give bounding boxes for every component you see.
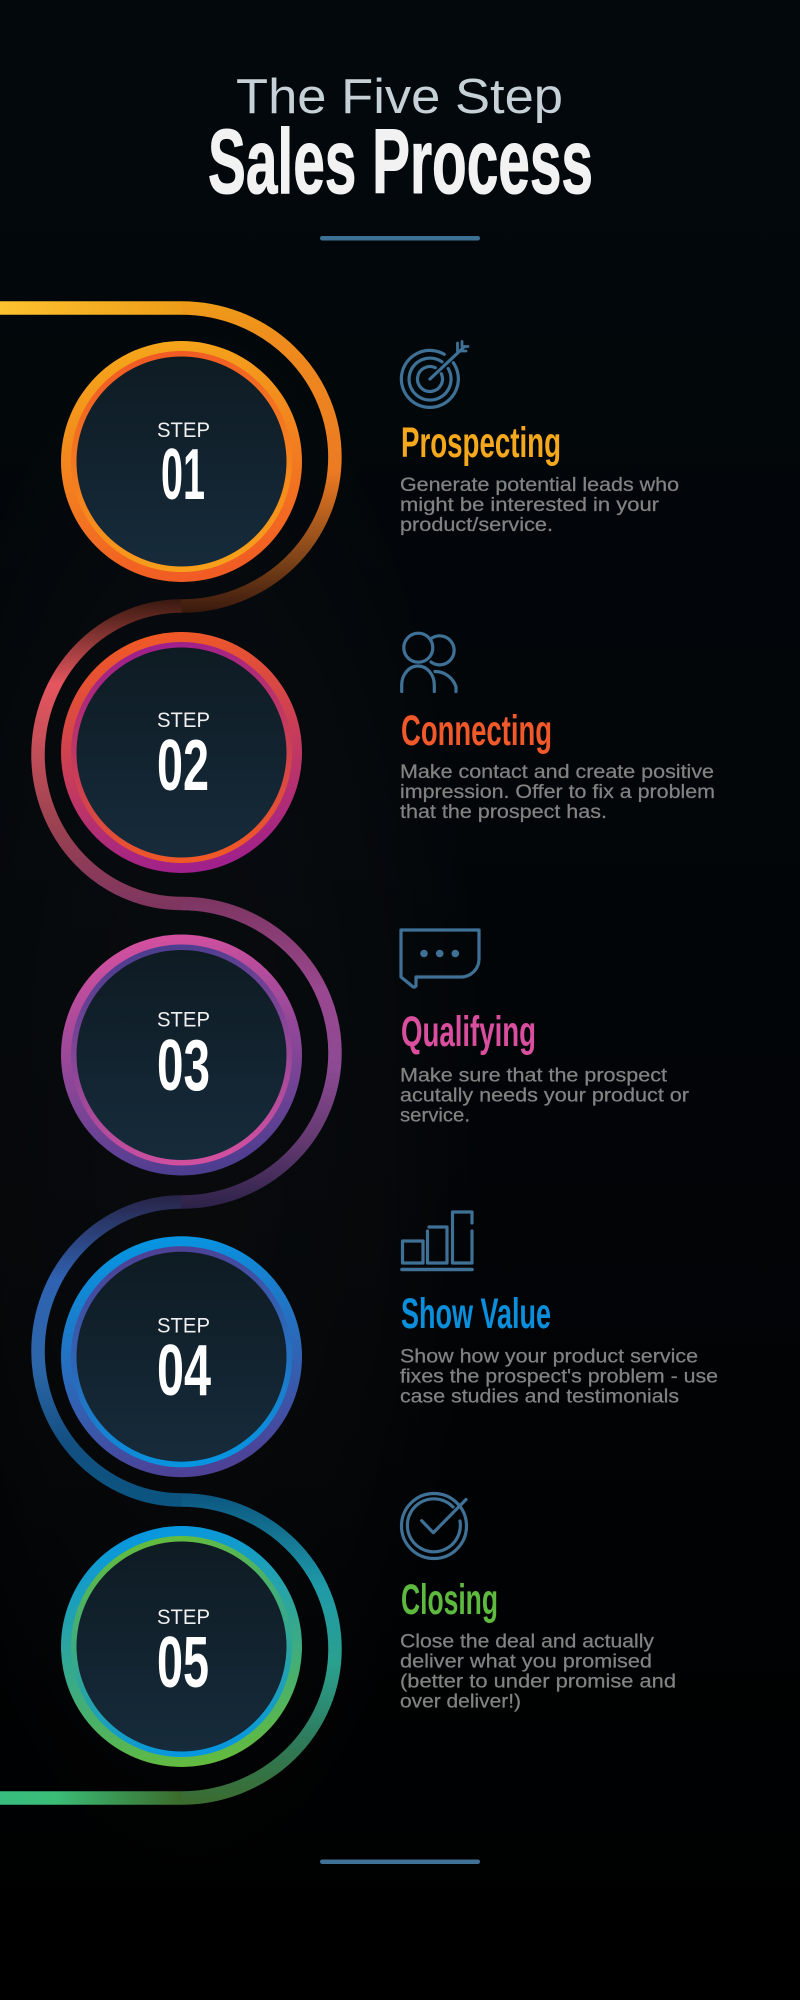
step 4 number: 04 <box>157 1331 211 1411</box>
bottom divider <box>320 1860 480 1864</box>
step 4 badge <box>61 1236 302 1477</box>
step 2 icon: people <box>402 633 456 692</box>
step 4 description: fixes the prospect's problem - use <box>400 1366 718 1388</box>
step 5 heading: Closing <box>401 1576 498 1624</box>
step 1 badge <box>61 341 302 582</box>
step 2 number: 02 <box>157 726 209 806</box>
step 1 description <box>400 475 679 536</box>
step 4 icon: bar chart <box>402 1212 472 1270</box>
step 1 description: product/service. <box>400 515 553 536</box>
step 5 badge <box>61 1526 302 1767</box>
step 2 description: impression. Offer to fix a problem <box>400 782 715 803</box>
step 5 icon: check mark <box>402 1494 466 1558</box>
step 5 description: deliver what you promised <box>400 1652 652 1672</box>
step 4 description: case studies and testimonials <box>400 1386 679 1408</box>
step 5 description <box>400 1632 676 1712</box>
step 3 heading: Qualifying <box>401 1008 536 1056</box>
step 2 description: that the prospect has. <box>400 802 607 823</box>
step 5 description: (better to under promise and <box>400 1672 676 1692</box>
step 3 label: STEP <box>157 1008 210 1032</box>
step 3 description: service. <box>400 1106 470 1126</box>
step 5 description: Close the deal and actually <box>400 1632 655 1652</box>
step 1 description: Generate potential leads who <box>400 475 679 496</box>
step 4 description <box>400 1346 718 1408</box>
step 1 label: STEP <box>157 419 210 442</box>
step 5 label: STEP <box>157 1606 210 1629</box>
step 2 label: STEP <box>157 709 210 732</box>
step 4 description: Show how your product service <box>400 1346 698 1368</box>
winding path connecting the steps <box>0 308 335 1798</box>
step 1 description: might be interested in your <box>400 495 660 516</box>
step 3 description: acutally needs your product or <box>400 1086 690 1106</box>
step 4 heading: Show Value <box>401 1290 551 1338</box>
step 5 description: over deliver!) <box>400 1692 521 1712</box>
step 1 icon: target <box>401 342 468 407</box>
step 3 badge <box>61 934 302 1176</box>
step 3 description: Make sure that the prospect <box>400 1066 668 1086</box>
title <box>208 70 593 213</box>
top divider <box>320 236 480 240</box>
step 2 heading: Connecting <box>401 707 552 755</box>
step 3 description <box>400 1066 690 1126</box>
step 5 number: 05 <box>157 1623 209 1703</box>
step 3 icon: speech bubble <box>401 930 479 987</box>
step 1 heading: Prospecting <box>401 419 561 467</box>
step 2 description: Make contact and create positive <box>400 762 714 783</box>
step 2 description <box>400 762 715 823</box>
step 1 number: 01 <box>161 435 205 515</box>
step 4 label: STEP <box>157 1314 210 1338</box>
step 3 number: 03 <box>157 1026 210 1106</box>
step 2 badge <box>61 632 302 873</box>
title line 1: The Five Step <box>236 70 563 124</box>
